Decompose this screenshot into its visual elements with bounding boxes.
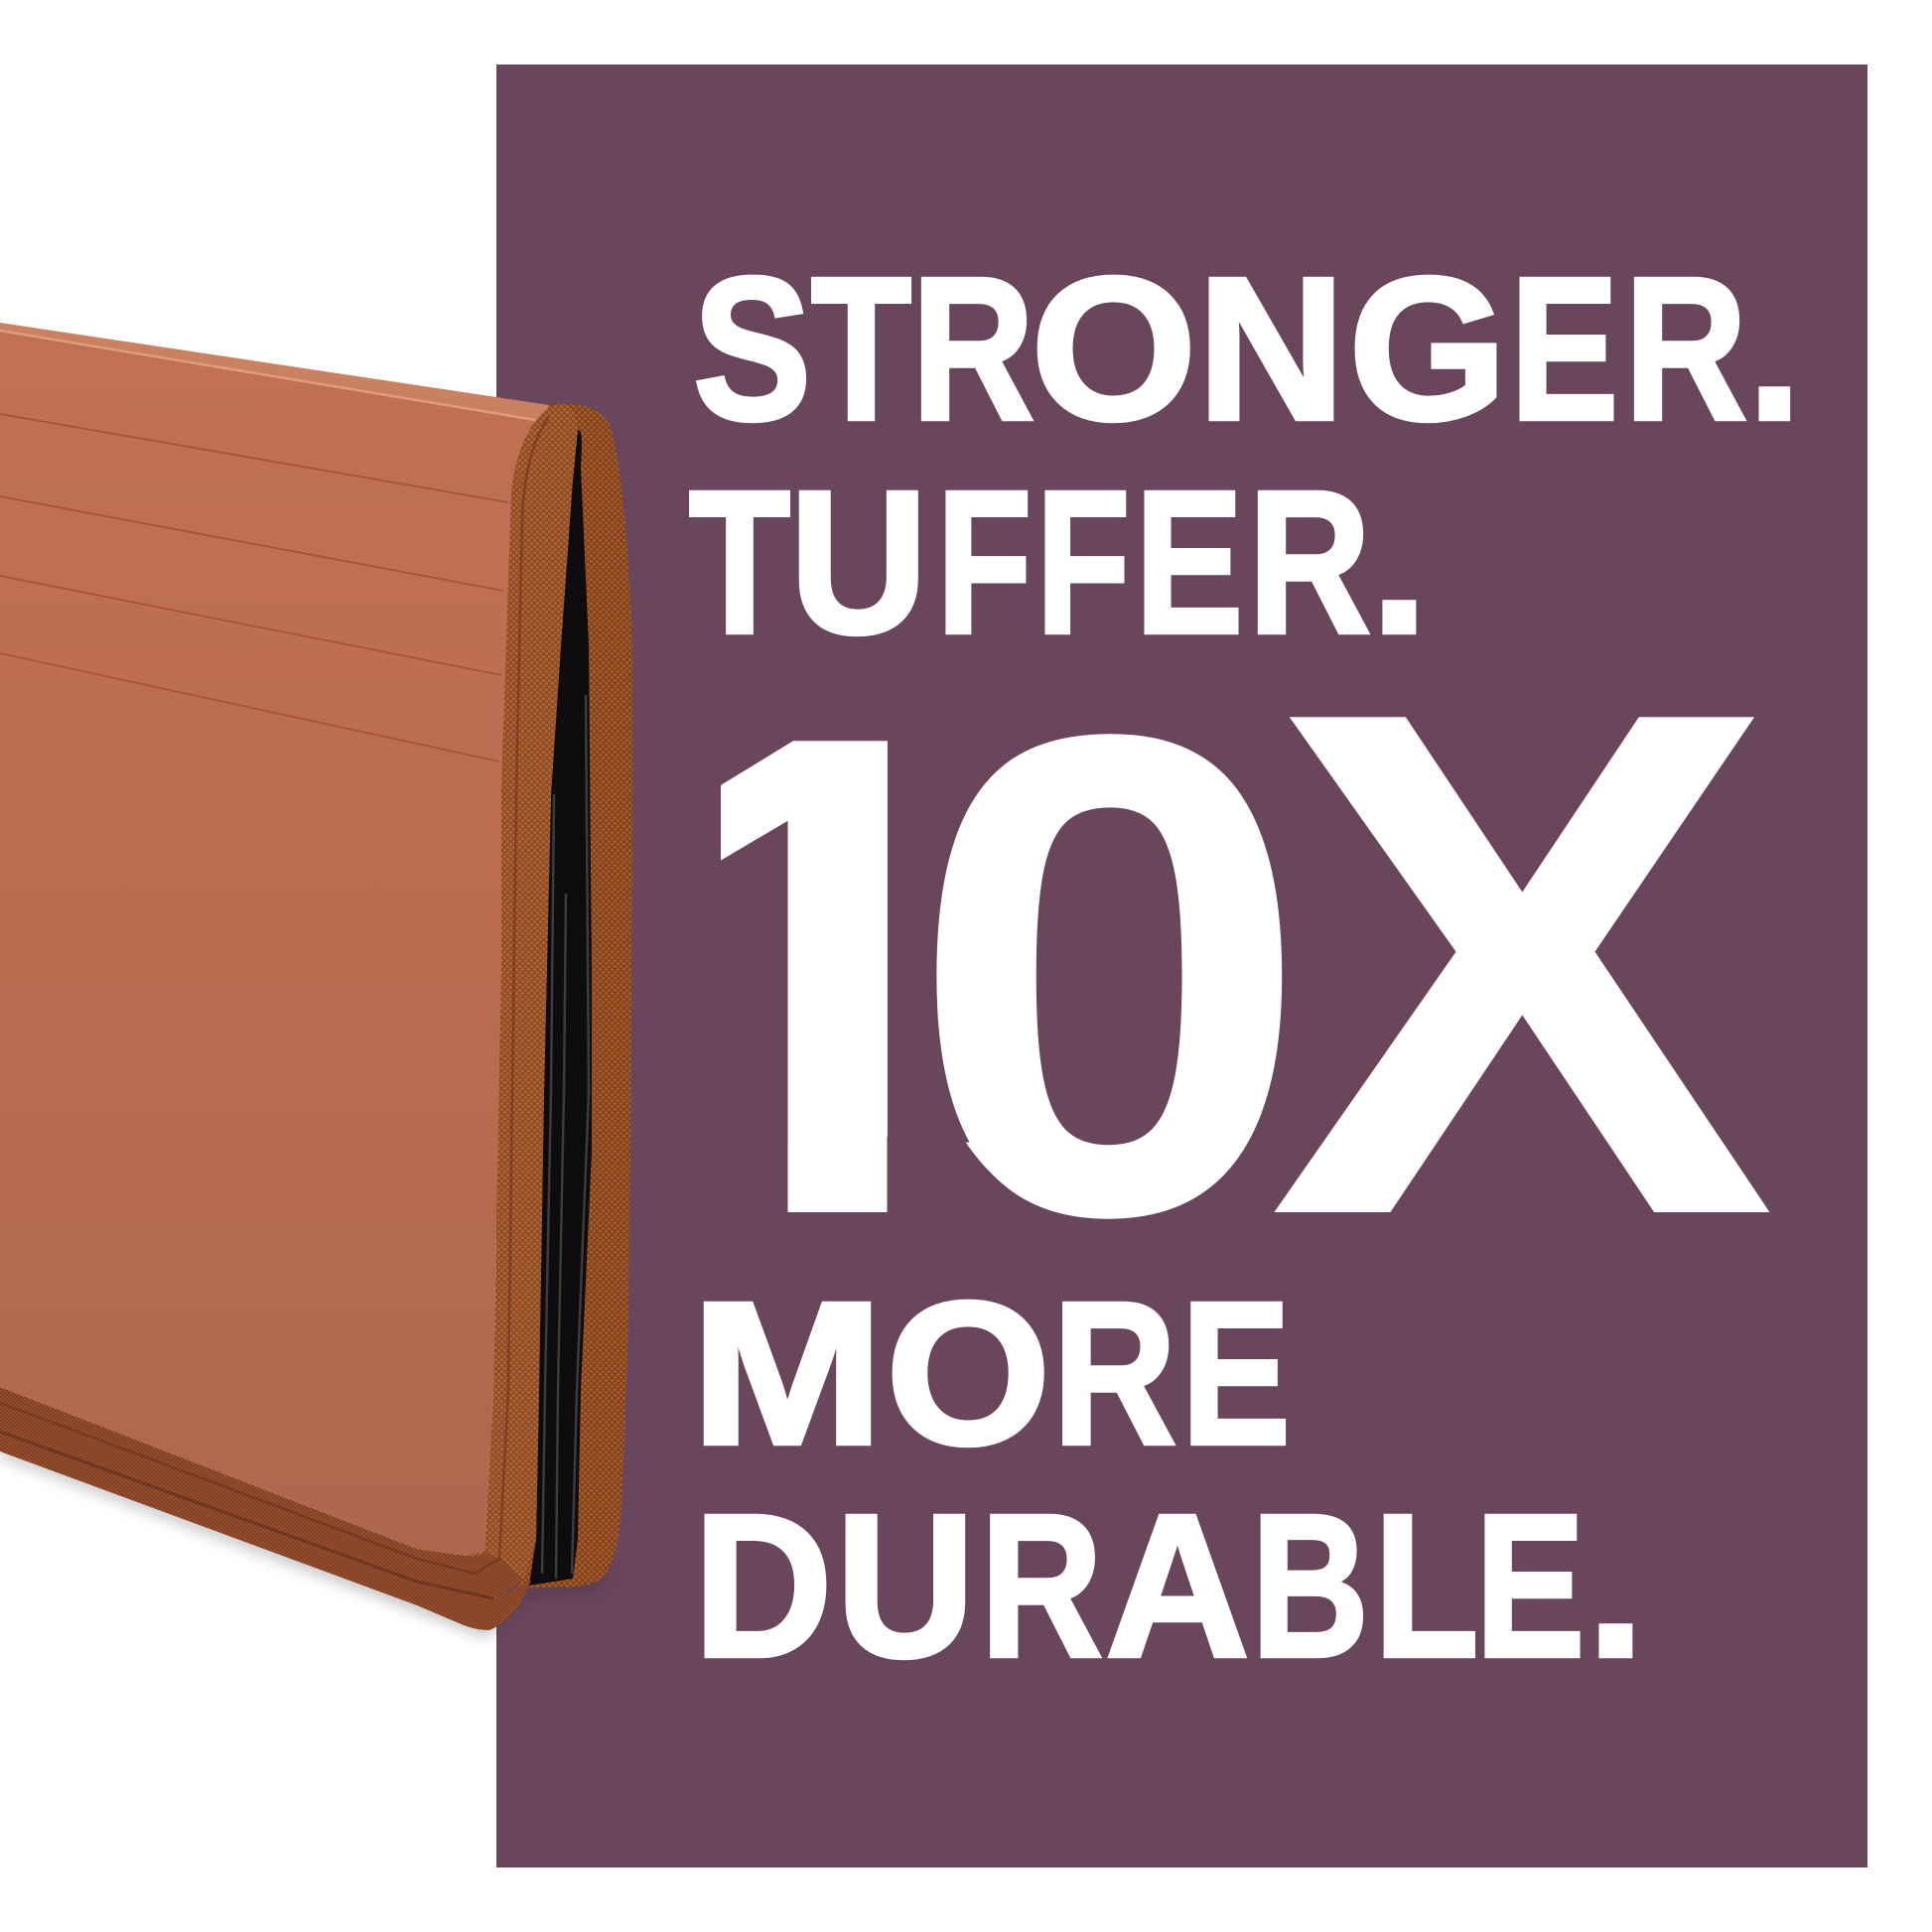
- panel: purple background: [496, 65, 1867, 1867]
- headline: DURABLE.: D: [694, 1472, 832, 1700]
- front cover face: [0, 332, 535, 1557]
- binding stitch seam: [0, 417, 549, 1574]
- headline: STRONGER.: G: [1348, 235, 1507, 463]
- headline: TUFFER.: E: [1135, 449, 1243, 676]
- folder drop shadow: [0, 1445, 618, 1638]
- big number: 10X: X: [1268, 562, 1780, 1365]
- front cover binding side: [467, 404, 578, 1598]
- headline: DURABLE.: U: [836, 1472, 975, 1700]
- highlight on top fold: [0, 331, 535, 420]
- headline: STRONGER.: O: [1031, 235, 1197, 463]
- headline: TUFFER.: .: [1371, 449, 1428, 676]
- headline: STRONGER.: R: [1624, 235, 1747, 463]
- product photo: brown expanding file folder: [0, 323, 632, 1638]
- back flap binding: [516, 404, 632, 1588]
- seam between front and back binding: [0, 1432, 493, 1598]
- front cover binding bottom: [0, 1387, 523, 1598]
- headline: DURABLE.: E: [1475, 1472, 1585, 1700]
- headline: MORE: E: [1181, 1260, 1291, 1487]
- headline: STRONGER.: N: [1197, 235, 1345, 463]
- headline: MORE: R: [1052, 1260, 1176, 1487]
- headline: TUFFER.: F: [937, 449, 1032, 676]
- headline: TUFFER.: F: [1036, 449, 1130, 676]
- headline: DURABLE.: .: [1587, 1472, 1644, 1700]
- headline: DURABLE.: A: [1106, 1472, 1249, 1700]
- headline: STRONGER.: E: [1510, 235, 1618, 463]
- headline: STRONGER.: T: [811, 235, 911, 463]
- headline: STRONGER.: S: [693, 235, 811, 463]
- headline: MORE: M: [691, 1260, 884, 1487]
- headline: DURABLE.: L: [1374, 1472, 1478, 1700]
- black inner pages: [529, 430, 592, 1586]
- inner page edges: [542, 695, 589, 1579]
- top flap edge: [0, 323, 549, 425]
- pressed score lines: [0, 414, 508, 761]
- headline: TUFFER.: U: [789, 449, 927, 676]
- big number: 10X: 10: [619, 592, 1311, 1358]
- headline: STRONGER.: R: [911, 235, 1035, 463]
- headline: MORE: O: [886, 1260, 1050, 1487]
- lower back binding strip: [0, 1432, 531, 1630]
- headline text: [689, 274, 1791, 1660]
- headline: DURABLE.: R: [981, 1472, 1102, 1700]
- headline: DURABLE.: B: [1251, 1472, 1369, 1700]
- headline: TUFFER.: R: [1248, 449, 1371, 676]
- big number: 10X: [721, 717, 1769, 1219]
- headline: STRONGER.: .: [1747, 235, 1801, 463]
- headline: TUFFER.: T: [689, 449, 790, 676]
